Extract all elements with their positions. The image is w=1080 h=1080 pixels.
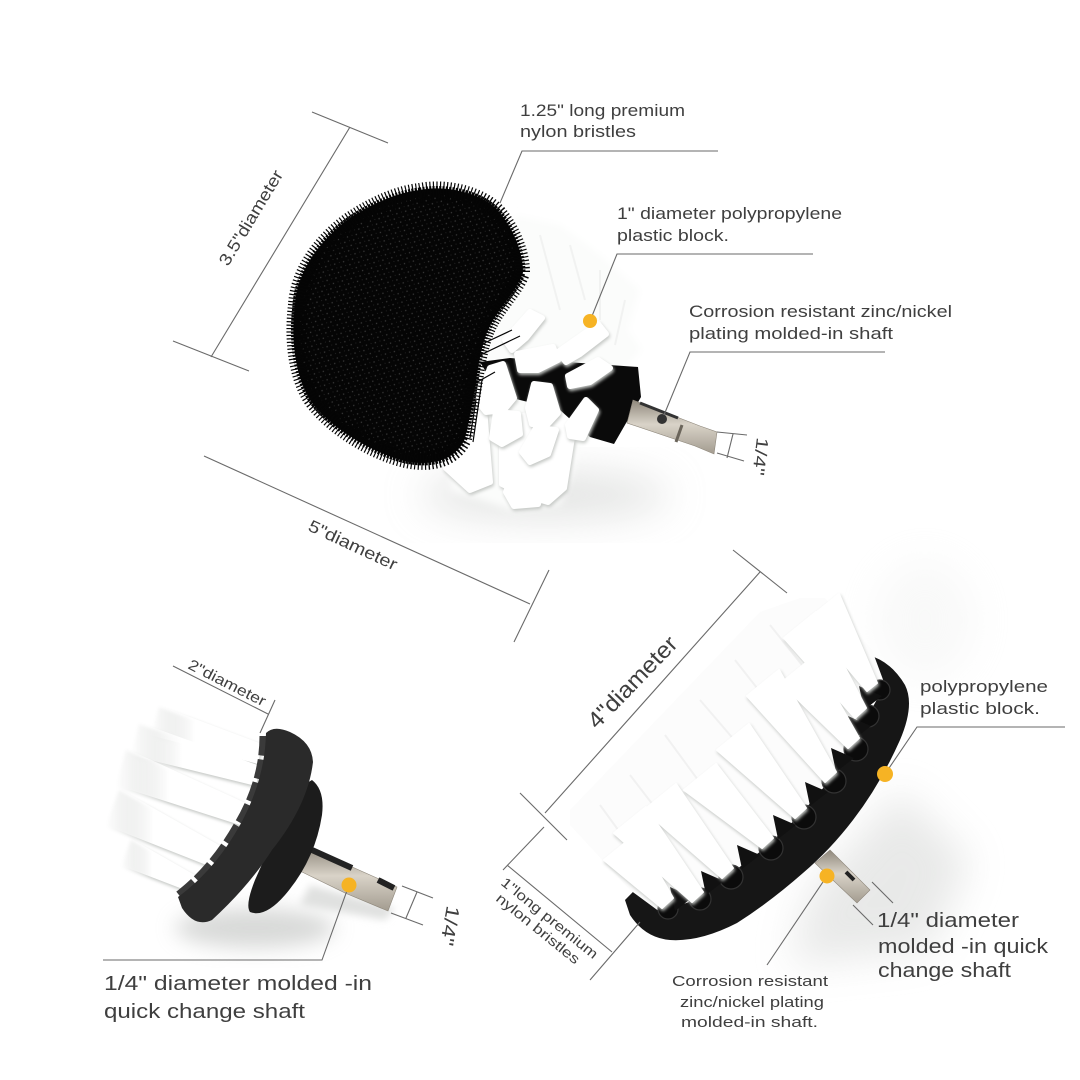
callout: corrosion resistant shaft: Corrosion resistant zinc/nickel bbox=[689, 303, 952, 321]
dark wedges between bristles bbox=[670, 686, 882, 911]
dimension: 2 inch diameter bbox=[173, 656, 275, 733]
shaft bbox=[627, 400, 717, 454]
white bristles behind bbox=[450, 215, 642, 510]
dimension: 4 inch diameter bbox=[520, 550, 787, 840]
callout: nylon bristles bbox=[500, 101, 718, 203]
dimension: 5 inch diameter: 5"diameter bbox=[305, 516, 401, 574]
dimension: 3.5 inch diameter: 3.5"diameter bbox=[215, 166, 287, 269]
callout: plastic block: plastic block. bbox=[617, 227, 729, 245]
left brush disc bbox=[178, 729, 313, 922]
dimension: left shaft quarter inch bbox=[391, 886, 463, 947]
left brush white bristles bbox=[105, 705, 262, 893]
right brush: 4 inch disc brush bbox=[570, 560, 975, 965]
callout: nylon bristles: nylon bristles bbox=[520, 122, 636, 141]
callout: right corrosion resistant shaft: Corrosion resistant bbox=[672, 974, 828, 990]
callout: right plastic block bbox=[877, 678, 1065, 782]
callout: right quick change shaft bbox=[853, 882, 1049, 982]
dimension: 4 inch diameter: 4"diameter bbox=[582, 630, 683, 733]
callout: right quick change shaft: 1/4" diameter bbox=[877, 910, 1019, 932]
callout: right quick change shaft: molded -in quick bbox=[878, 936, 1049, 958]
upper bristle texture bbox=[540, 235, 625, 345]
callout: right quick change shaft: change shaft bbox=[878, 960, 1012, 982]
dimension: 1 inch long bristles bbox=[493, 827, 640, 980]
callout: corrosion resistant shaft: plating molded-in shaft bbox=[689, 325, 894, 343]
callout: nylon bristles: 1.25" long premium bbox=[520, 101, 685, 120]
front bristles bbox=[604, 594, 877, 908]
left brush: 2 inch disc brush bbox=[105, 705, 397, 948]
dimension: top shaft quarter inch: 1/4" bbox=[748, 437, 772, 477]
lower white tufts back row bbox=[442, 408, 576, 506]
callout: left quick change shaft bbox=[103, 878, 372, 1023]
callout: right plastic block: polypropylene bbox=[920, 678, 1048, 696]
right brush soft shadows bbox=[875, 560, 975, 680]
dimension: left shaft quarter inch: 1/4" bbox=[435, 904, 463, 947]
dimension: 3.5 inch diameter bbox=[173, 112, 388, 371]
bristle mass bbox=[570, 598, 885, 912]
callout: corrosion resistant shaft bbox=[664, 303, 952, 415]
dimension: 1 inch long bristles: nylon bristles bbox=[493, 890, 583, 967]
black hub and flange bbox=[480, 358, 641, 444]
callout: plastic block bbox=[583, 205, 842, 328]
bristle sockets bbox=[658, 680, 890, 919]
callout: right corrosion resistant shaft bbox=[672, 868, 834, 1031]
front white tufts bbox=[478, 312, 610, 462]
left brush shadow bbox=[175, 908, 335, 948]
callout: plastic block: 1" diameter polypropylene bbox=[617, 205, 842, 223]
left brush rim sockets bbox=[180, 736, 266, 897]
bristle texture bbox=[600, 625, 830, 860]
dimension: 5 inch diameter bbox=[204, 456, 549, 642]
black nylon ball bristles bbox=[296, 191, 520, 460]
dimension: 2 inch diameter: 2"diameter bbox=[185, 656, 269, 710]
right shaft bbox=[815, 850, 870, 903]
callout: right corrosion resistant shaft: zinc/nickel plating bbox=[680, 995, 824, 1011]
left brush shaft bbox=[300, 847, 397, 911]
dimension: top shaft quarter inch bbox=[717, 432, 772, 477]
right brush disc bbox=[625, 655, 909, 940]
top brush shadow bbox=[420, 471, 670, 519]
callout: right corrosion resistant shaft: molded-in shaft. bbox=[681, 1015, 818, 1031]
dimension: 1 inch long bristles: 1"long premium bbox=[498, 874, 601, 962]
callout: right plastic block: plastic block. bbox=[920, 700, 1040, 718]
callout: left quick change shaft: quick change shaft bbox=[104, 1001, 306, 1023]
right brush ground shadow bbox=[790, 790, 970, 965]
top brush: ball bristle brush bbox=[296, 191, 717, 519]
left brush rear hub bbox=[248, 780, 323, 913]
left shaft shadow bbox=[300, 885, 395, 920]
callout: left quick change shaft: 1/4" diameter molded -in bbox=[104, 973, 372, 995]
